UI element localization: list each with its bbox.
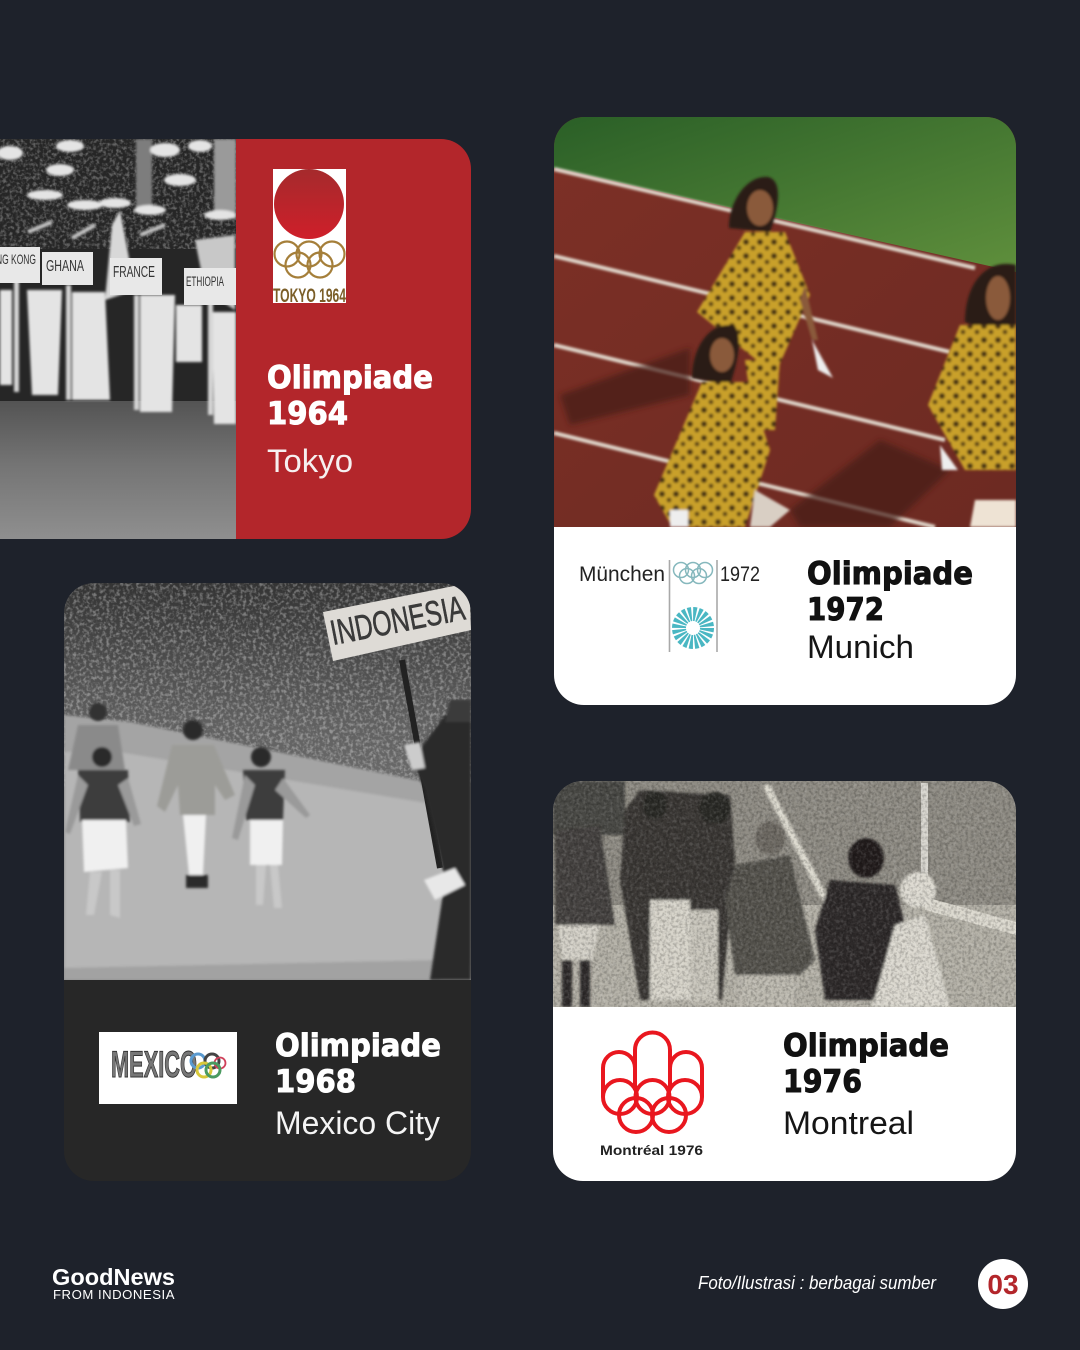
panel: Olimpiade 1968 Mexico City [64,583,471,1181]
photo: Indonesian delegation with flag, Montreal 1976 [553,781,1016,1007]
photo: athletes with country signs, Tokyo 1964: FRANCE [113,264,155,281]
figure: athlete two [654,325,790,527]
heading: Olimpiade 1968: 1968 [275,1064,356,1100]
heading: Olimpiade 1972: Olimpiade [807,556,973,592]
figure: dark jacket man [815,838,905,1000]
figure: woman one [65,747,141,918]
white caption background [553,1007,1016,1181]
logo: Tokyo 1964: TOKYO 1964 [273,286,346,307]
white caption background [554,527,1016,705]
figures: marching group centre [620,790,735,1002]
panel: Olimpiade 1964 Tokyo [0,139,471,539]
logo: Montreal 1976: Montréal 1976 [600,1143,704,1158]
logo: Mexico 68: MEXICO [111,1044,197,1085]
photo: athletes with country signs, Tokyo 1964: GHANA [46,258,84,275]
heading: Olimpiade 1976: 1976 [783,1064,862,1100]
photo: athletes with country signs, Tokyo 1964 [0,139,236,539]
logo: Mexico 68 [99,1032,237,1104]
photo credit: Foto/Ilustrasi : berbagai sumber [698,1273,937,1293]
logo: Tokyo 1964 [273,169,346,307]
photo: athletes in batik ponchos on track, Munich 1972 [554,117,1016,527]
panel: Olimpiade 1972 Munich [554,117,1016,705]
figure: athlete three [928,264,1016,527]
panel: Olimpiade 1976 Montreal [553,781,1016,1181]
logo: Munich 1972: 1972 [720,562,760,586]
city: Munich: Munich [807,629,914,665]
photo: athletes with country signs, Tokyo 1964: ETHIOPIA [186,273,224,289]
page number badge [978,1259,1028,1309]
footer brand: GoodNews from Indonesia: FROM INDONESIA [53,1288,175,1302]
heading: Olimpiade 1968: Olimpiade [275,1028,441,1064]
logo: Munich 1972: München [579,562,665,586]
photo: Indonesian delegation marching, Mexico 1968 [64,583,471,980]
figure: woman two [232,747,310,908]
figures: marching group left [553,781,625,1007]
page number badge: 03 [987,1269,1019,1300]
figure: man in background [68,703,125,770]
sign: INDONESIA [323,583,471,661]
heading: Olimpiade 1976: Olimpiade [783,1028,949,1064]
figure: official with sign [404,700,471,980]
logo: Montreal 1976 [600,1032,704,1158]
footer brand: GoodNews from Indonesia: GoodNews [52,1264,175,1290]
city: Montreal: Montreal [783,1105,914,1141]
city: Mexico City: Mexico City [275,1105,440,1141]
logo: Munich 1972 [579,560,760,652]
figure: athlete one [697,177,833,430]
figure: flag bearer man [725,821,815,1007]
figure: woman in white dress [872,872,950,1007]
heading: Olimpiade 1964: 1964 [267,396,348,432]
city: Tokyo: Tokyo [267,443,353,479]
heading: Olimpiade 1972: 1972 [807,592,884,628]
footer brand: GoodNews from Indonesia [52,1264,175,1302]
dark caption background [64,980,471,1181]
sign: INDONESIA: INDONESIA [327,589,468,653]
figure: man with patterned jacket [157,720,235,888]
red text block background [236,139,471,539]
heading: Olimpiade 1964: Olimpiade [267,360,433,396]
